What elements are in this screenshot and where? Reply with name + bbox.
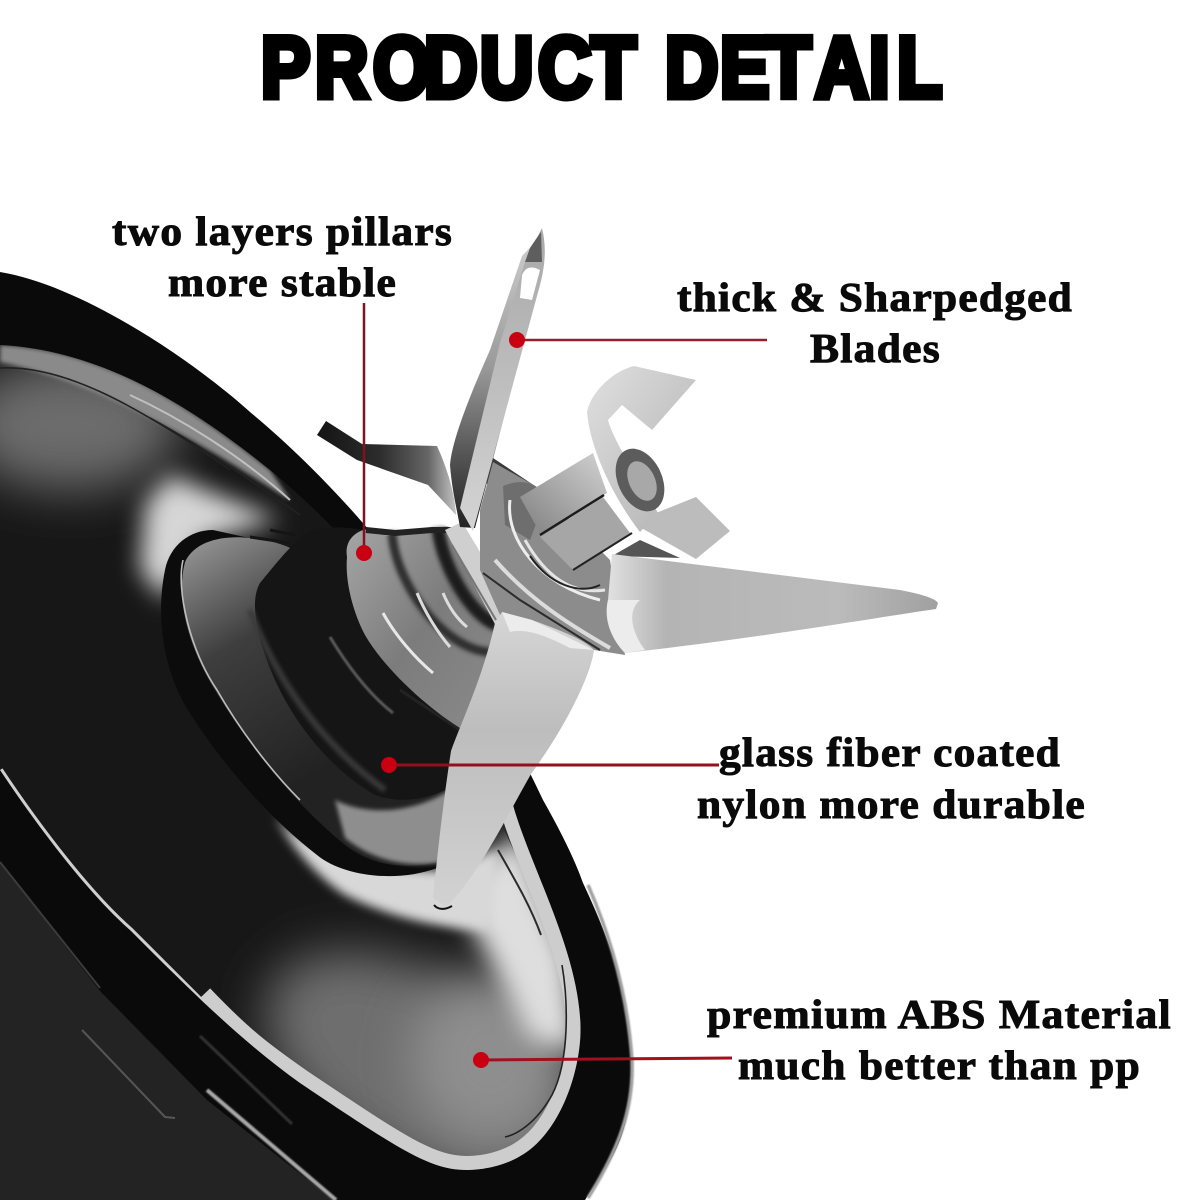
- flange lower lip: [335, 790, 450, 864]
- flange surface: [182, 537, 460, 866]
- flange glare: [140, 475, 280, 600]
- callout: ABS material: much better than pp: [738, 1042, 1141, 1088]
- washer: [445, 522, 512, 628]
- recessed disc: [0, 345, 581, 1170]
- rear blade right stub: [485, 458, 538, 510]
- glare beneath hub: [275, 815, 500, 930]
- callout: blades: Blades: [810, 325, 941, 371]
- right side glare: [450, 830, 575, 1050]
- callout: glass fiber nylon: glass fiber coated: [719, 729, 1061, 775]
- blender base: [0, 272, 640, 1200]
- two-layer pillars: [347, 522, 512, 732]
- top grey sheen: [0, 360, 180, 490]
- callout: two layers pillars: [112, 208, 453, 561]
- blade tip slot: [525, 232, 542, 262]
- nut bore: [606, 441, 674, 519]
- upright blade rear face: [450, 235, 542, 528]
- callout: ABS material: premium ABS Material: [707, 991, 1172, 1037]
- upright blade front face: [460, 228, 545, 531]
- nylon highlights: [330, 637, 393, 713]
- lower blade: [433, 612, 594, 907]
- right blade: [607, 554, 938, 653]
- callout: two layers pillars: more stable: [168, 259, 397, 305]
- title: PRODUCT DETAIL: [261, 19, 942, 115]
- callout: ABS material: [473, 991, 1172, 1088]
- lower grey field: [237, 922, 569, 1170]
- blade assembly: [317, 228, 938, 909]
- black flange ring: [161, 530, 460, 876]
- rear left blade: [317, 421, 456, 515]
- top rim lines: [0, 368, 300, 515]
- hex nut: [520, 453, 607, 533]
- callout: blades: thick & Sharpedged: [677, 274, 1073, 320]
- housing button: [82, 1030, 175, 1118]
- black ring silhouette: [0, 272, 632, 1200]
- grey outer edge: [588, 885, 632, 1198]
- callout: glass fiber nylon: nylon more durable: [697, 781, 1086, 827]
- lower wing: [638, 497, 730, 559]
- nylon cone: [255, 527, 490, 800]
- housing body: [0, 862, 333, 1200]
- top right blade: [587, 366, 696, 532]
- central washer stack: [480, 462, 625, 655]
- callout: two layers pillars: two layers pillars: [112, 208, 453, 254]
- callout: blades: [509, 274, 1073, 371]
- callout: glass fiber nylon: [381, 729, 1086, 827]
- inner rim stripes: [497, 828, 542, 936]
- hub: flange and nylon cone: [161, 527, 490, 876]
- light rim band: [200, 805, 581, 1170]
